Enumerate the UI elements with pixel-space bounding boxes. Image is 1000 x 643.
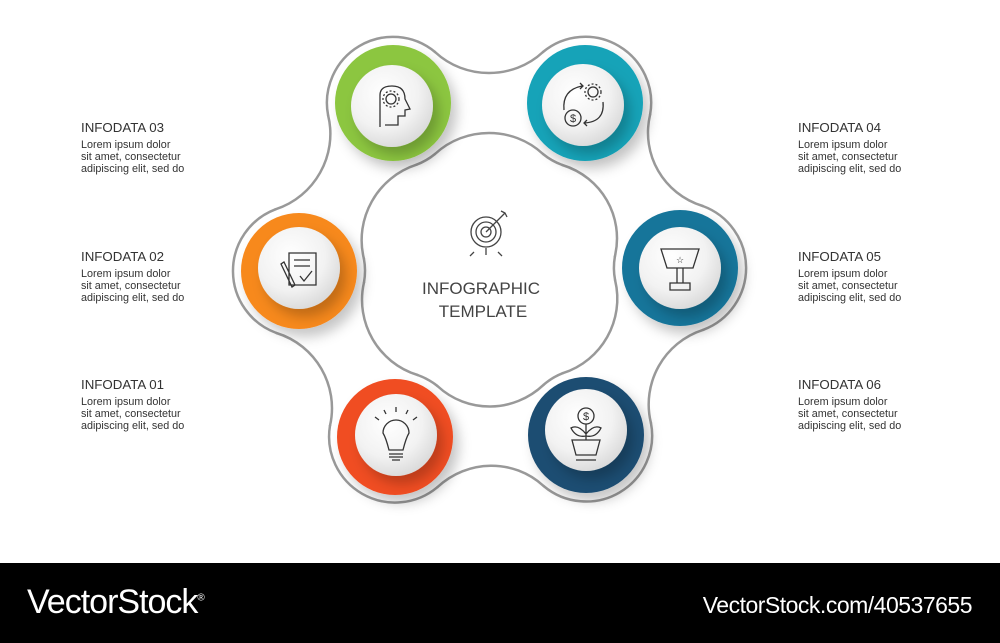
circle 01 red bbox=[337, 379, 453, 495]
label 04: Lorem ipsum dolor bbox=[798, 139, 887, 151]
label 06: Lorem ipsum dolor bbox=[798, 396, 887, 408]
footer: VectorStock.com/40537655 bbox=[703, 592, 972, 618]
circle 05 blue bbox=[622, 210, 738, 326]
label 04 bbox=[798, 120, 901, 175]
label 05 bbox=[798, 249, 901, 304]
label 02: adipiscing elit, sed do bbox=[81, 292, 184, 304]
label 06 bbox=[798, 377, 901, 432]
label 01: INFODATA 01 bbox=[81, 377, 164, 392]
label 06: INFODATA 06 bbox=[798, 377, 881, 392]
label 03 bbox=[81, 120, 184, 175]
label 01 bbox=[81, 377, 184, 432]
label 02: sit amet, consectetur bbox=[81, 280, 181, 292]
center title: INFOGRAPHIC bbox=[422, 279, 540, 298]
label 05: INFODATA 05 bbox=[798, 249, 881, 264]
label 04: adipiscing elit, sed do bbox=[798, 163, 901, 175]
circle 06 navy bbox=[528, 377, 644, 493]
icon: target bbox=[470, 211, 507, 256]
circle 04 teal: $ bbox=[570, 113, 576, 125]
label 02: Lorem ipsum dolor bbox=[81, 268, 170, 280]
circle 05 blue: ☆ bbox=[676, 255, 684, 265]
label 06: adipiscing elit, sed do bbox=[798, 420, 901, 432]
footer: VectorStock® bbox=[27, 583, 204, 621]
label 02: INFODATA 02 bbox=[81, 249, 164, 264]
label 01: adipiscing elit, sed do bbox=[81, 420, 184, 432]
footer bbox=[0, 563, 1000, 643]
circle 06 navy: $ bbox=[583, 411, 589, 423]
label 04: INFODATA 04 bbox=[798, 120, 881, 135]
label 04: sit amet, consectetur bbox=[798, 151, 898, 163]
label 03: adipiscing elit, sed do bbox=[81, 163, 184, 175]
label 05: sit amet, consectetur bbox=[798, 280, 898, 292]
circle 02 orange bbox=[241, 213, 357, 329]
circle 04 teal bbox=[527, 45, 643, 161]
diagram: TEMPLATE bbox=[439, 302, 527, 321]
label 02 bbox=[81, 249, 184, 304]
label 05: Lorem ipsum dolor bbox=[798, 268, 887, 280]
label 06: sit amet, consectetur bbox=[798, 408, 898, 420]
label 05: adipiscing elit, sed do bbox=[798, 292, 901, 304]
circle 03 green bbox=[335, 45, 451, 161]
label 03: sit amet, consectetur bbox=[81, 151, 181, 163]
label 01: sit amet, consectetur bbox=[81, 408, 181, 420]
label 03: Lorem ipsum dolor bbox=[81, 139, 170, 151]
label 03: INFODATA 03 bbox=[81, 120, 164, 135]
label 01: Lorem ipsum dolor bbox=[81, 396, 170, 408]
